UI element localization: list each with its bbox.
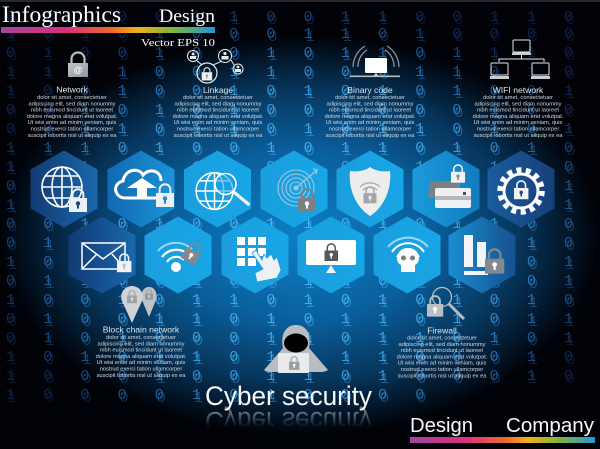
icon: connected laptops (490, 40, 550, 79)
text: network body: nibh euismod tincidunt ut laoreet (31, 108, 113, 114)
text: linkage body: suscipit lobortis nisl ut aliquip ex ea (174, 133, 263, 139)
text: network body: adipiscing elit, sed diam nonummy (29, 101, 116, 107)
text: firewall body: Ut wisi enim ad minim veniam, quis (398, 361, 487, 367)
title bar: Design (159, 6, 216, 27)
text: wifi network body: suscipit lobortis nisl ut aliquip ex ea (474, 133, 563, 139)
panel: linkage (173, 50, 264, 139)
text: binary code body: adipiscing elit, sed diam nonummy (327, 101, 414, 107)
text: block chain body: nostrud exerci tation ullamcorper (100, 366, 182, 372)
hexagon: wifi with skull (374, 216, 440, 294)
text: binary code body: nibh euismod tincidunt ut laoreet (329, 108, 411, 114)
text: block chain body: nibh euismod tincidunt ut laoreet (100, 348, 182, 354)
title bar (1, 2, 216, 49)
hexagon: cloud upload lock (108, 150, 174, 228)
icon: linked nodes (188, 50, 243, 83)
text: binary code body: Ut wisi enim ad minim veniam, quis (326, 120, 415, 126)
hexagon: bar chart lock (448, 216, 516, 294)
text: block chain body: adipiscing elit, sed diam nonummy (98, 341, 185, 347)
hexagon: keypad and hand (222, 216, 288, 294)
text: wifi network body: Ut wisi enim ad minim veniam, quis (474, 120, 563, 126)
panel: block chain network (96, 286, 187, 379)
hexagon: credit cards with lock (412, 150, 480, 228)
text: firewall body: nostrud exerci tation ullamcorper (401, 367, 483, 373)
panel: network (27, 52, 118, 139)
text: network body: suscipit lobortis nisl ut aliquip ex ea (28, 133, 117, 139)
hexagon: gear with lock (488, 150, 554, 228)
text: network body: Ut wisi enim ad minim veniam, quis (28, 120, 117, 126)
hexagon: monitor with lock (298, 216, 364, 294)
text: block chain body: dolor sit amet, consectetuer (106, 335, 176, 341)
text: binary code body: nostrud exerci tation ullamcorper (329, 126, 411, 132)
panel: firewall (397, 288, 488, 379)
panel: binary code (325, 46, 416, 139)
text: linkage body: adipiscing elit, sed diam nonummy (175, 101, 262, 107)
text: binary code body: suscipit lobortis nisl ut aliquip ex ea (326, 133, 415, 139)
label: linkage: Linkage (203, 85, 233, 95)
text: network body: dolore magna aliquam erat volutpat. (27, 114, 118, 120)
text: block chain body: dolore magna aliquam erat volutpat. (96, 354, 187, 360)
text: firewall body: adipiscing elit, sed diam nonummy (399, 342, 486, 348)
text: network body: nostrud exerci tation ullamcorper (31, 126, 113, 132)
text: linkage body: dolor sit amet, consectetuer (183, 95, 253, 101)
hexagon: envelope lock (68, 216, 136, 294)
text: firewall body: dolore magna aliquam erat volutpat. (397, 354, 488, 360)
footer: design company (410, 415, 595, 443)
label: network: Network (56, 84, 88, 94)
footer: design company: Company (506, 415, 594, 437)
icon: broadcasting monitor (350, 46, 400, 77)
text: binary code body: dolor sit amet, consectetuer (335, 95, 405, 101)
text: linkage body: dolore magna aliquam erat volutpat. (173, 114, 264, 120)
icon: hooded hacker with laptop (264, 325, 328, 373)
heading: cyber security: Cyber security (205, 381, 372, 411)
panel: wifi network (473, 40, 564, 139)
icon: padlock with at sign: @ (73, 65, 83, 75)
hexagon: target with arrow (260, 150, 328, 228)
label: block chain network: Block chain network (103, 324, 180, 334)
hexagon: globe lock (30, 150, 98, 228)
text: wifi network body: dolore magna aliquam erat volutpat. (473, 114, 564, 120)
footer: design company: Design (410, 415, 473, 437)
text: network body: dolor sit amet, consectetuer (37, 95, 107, 101)
hexagon: wifi with tilted lock (144, 216, 212, 294)
title bar: Infographics (2, 2, 121, 28)
text: firewall body: nibh euismod tincidunt ut laoreet (401, 348, 483, 354)
text: wifi network body: dolor sit amet, consectetuer (483, 95, 553, 101)
label: firewall: Firewall (427, 326, 457, 336)
text: binary code body: dolore magna aliquam erat volutpat. (325, 114, 416, 120)
heading reflection: Cyber security (205, 406, 372, 436)
text: wifi network body: nostrud exerci tation ullamcorper (477, 126, 559, 132)
icon: location pins (121, 286, 157, 323)
text: block chain body: suscipit lobortis nisl ut aliquip ex ea (97, 373, 186, 379)
binary code rain: 0 1 1 0 0 1 1 0 0 1 1 0 0 1 1 0 (6, 9, 583, 26)
text: block chain body: Ut wisi enim ad minim veniam, quis (97, 360, 186, 366)
text: linkage body: Ut wisi enim ad minim veniam, quis (174, 120, 263, 126)
label: binary code: Binary code (347, 85, 393, 95)
text: wifi network body: adipiscing elit, sed diam nonummy (475, 101, 562, 107)
text: wifi network body: nibh euismod tincidunt ut laoreet (477, 108, 559, 114)
title bar: Vector EPS 10 (141, 37, 216, 49)
text: linkage body: nibh euismod tincidunt ut laoreet (177, 108, 259, 114)
hexagon: globe with magnifier (184, 150, 251, 228)
hexagon: shield with wifi lock (336, 150, 404, 228)
text: linkage body: nostrud exerci tation ullamcorper (177, 126, 259, 132)
text: firewall body: dolor sit amet, consectetuer (407, 336, 477, 342)
icon: lock and magnifier (427, 288, 464, 319)
binary code rain: 1 0 0 0 0 1 0 1 0 0 0 0 (6, 387, 434, 404)
label: wifi network: WIFI network (493, 85, 544, 95)
text: firewall body: suscipit lobortis nisl ut aliquip ex ea (398, 373, 487, 379)
